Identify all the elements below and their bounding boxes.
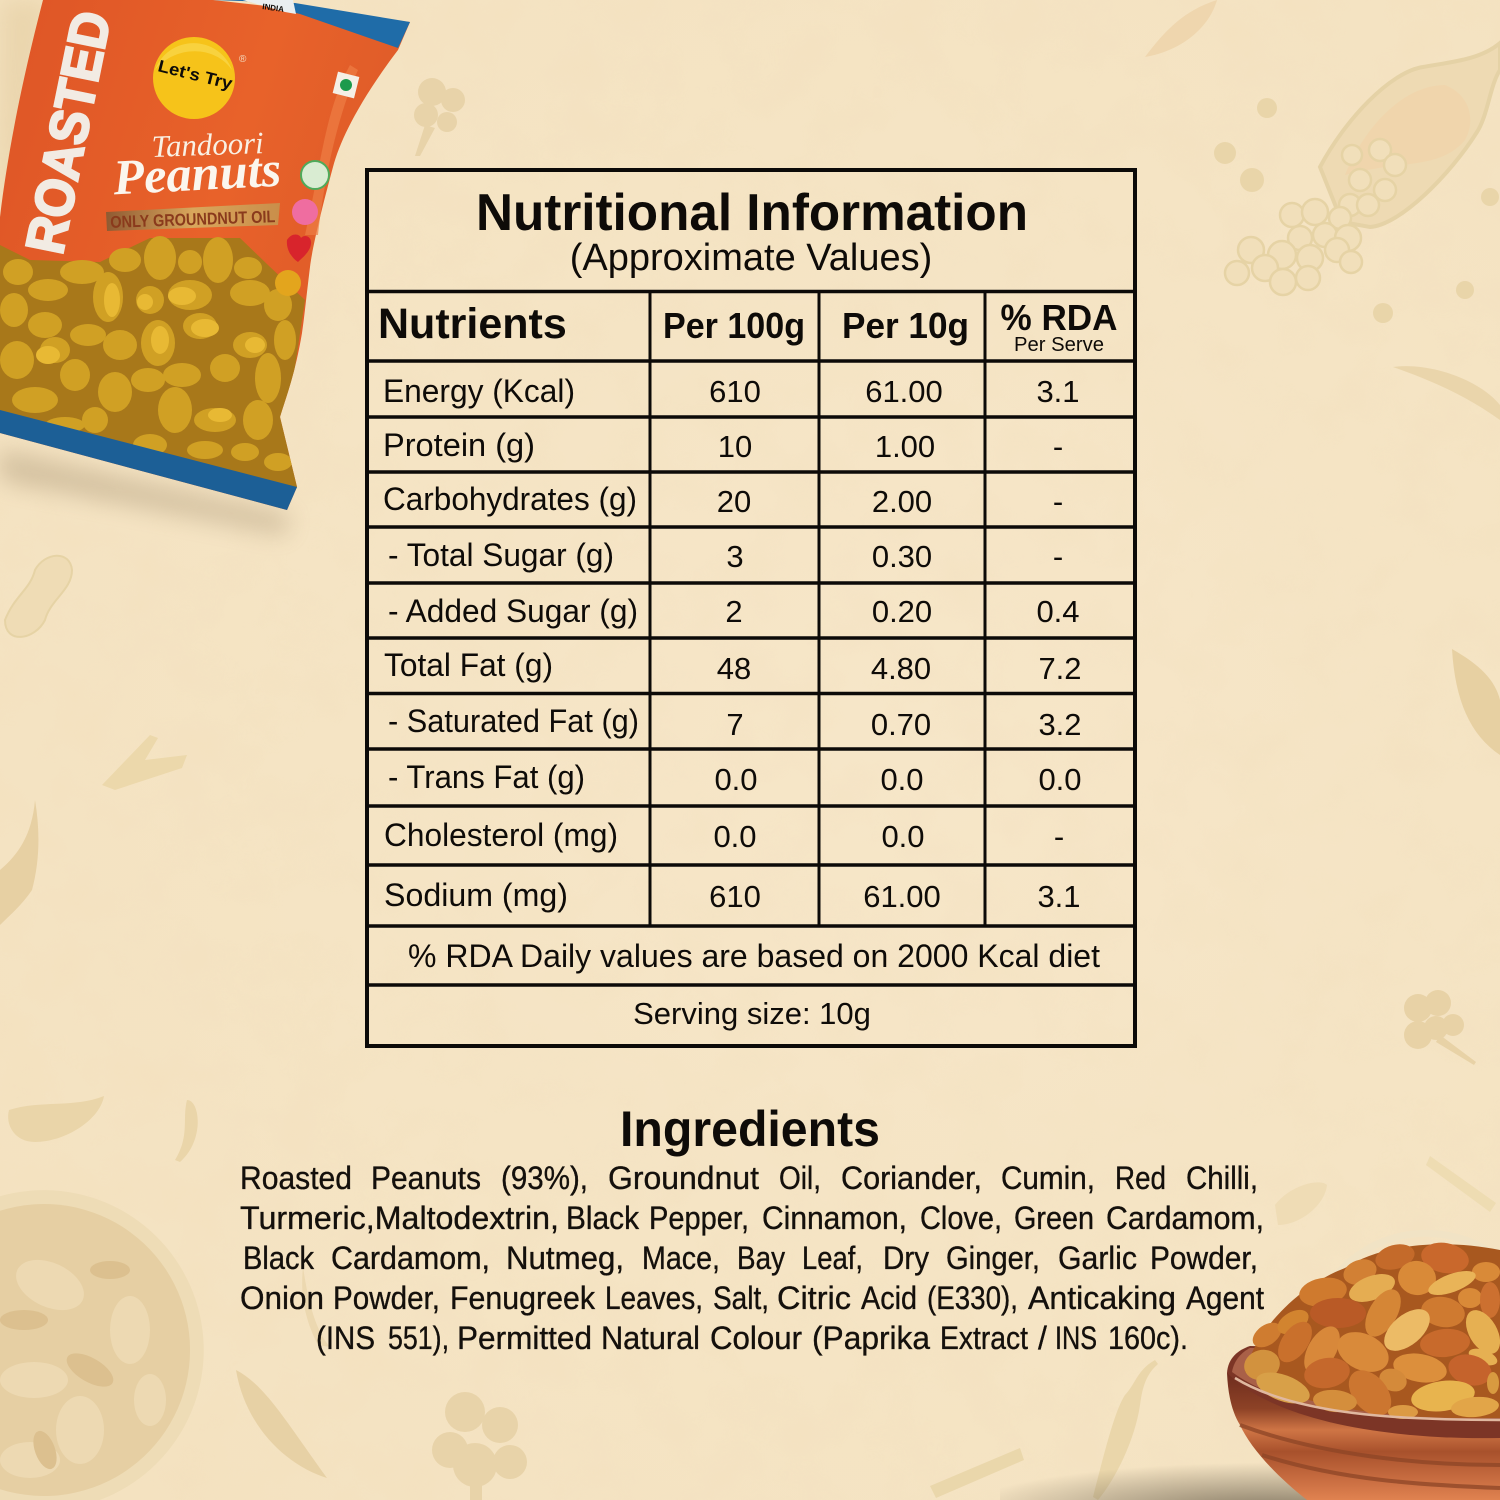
row: added sugar: - Added Sugar (g): [388, 593, 638, 629]
row: energy: 61.00: [865, 374, 943, 409]
row: sodium: 3.1: [1037, 879, 1081, 914]
product pack: [0, 0, 410, 510]
icon: bay leaf right: [1452, 649, 1500, 755]
icon: spice bowl bottom left: [0, 1190, 204, 1500]
header row: Nutrients: [378, 300, 567, 348]
header row: % RDA: [1000, 297, 1118, 338]
top blue seal: [213, 0, 410, 48]
product name: [106, 125, 282, 232]
ingredients text: Garlic: [1058, 1240, 1137, 1276]
header row: [378, 297, 1118, 356]
ingredients text: Anticaking: [1028, 1280, 1176, 1316]
rim front highlight: [1235, 1378, 1500, 1420]
row: cholesterol: 0.0: [881, 819, 925, 854]
row: total fat: 4.80: [871, 651, 931, 686]
bottom blue seal: [0, 410, 297, 510]
footnote: rda: % RDA Daily values are based on 2000 Kcal diet: [408, 938, 1100, 974]
nutrition table: [367, 170, 1135, 1046]
icon: coriander right: [1404, 990, 1476, 1065]
icon: bay leaf bottom: [236, 1370, 327, 1478]
pack shadow: [0, 450, 290, 535]
bowl shadow: [1000, 1420, 1500, 1500]
row: added sugar: 0.20: [872, 594, 932, 629]
pack highlight: [305, 65, 358, 235]
row: energy: 610: [709, 374, 761, 409]
ingredients text: Agent: [1186, 1280, 1264, 1316]
row: energy: Energy (Kcal): [383, 373, 575, 409]
ingredients text: Permitted: [457, 1320, 592, 1356]
icon: coriander bottom: [432, 1392, 527, 1500]
row: total fat: 48: [717, 651, 751, 686]
row: sodium: [384, 877, 1081, 914]
table title: Nutritional Information: [476, 183, 1028, 241]
row: carbohydrates: Carbohydrates (g): [383, 481, 637, 517]
icon: green chilli left: [0, 800, 38, 925]
ingredients text: Colour: [710, 1320, 802, 1356]
icon: peanut bottom left: [8, 1096, 104, 1142]
ingredients text: (93%),: [501, 1160, 588, 1196]
ingredients text: Onion: [240, 1280, 324, 1316]
logo: [153, 37, 247, 119]
ingredients heading: Ingredients: [620, 1101, 880, 1157]
row: trans fat: 0.0: [714, 762, 758, 797]
row: cholesterol: 0.0: [713, 819, 757, 854]
header row: Per 100g: [663, 305, 805, 346]
ingredients text: Black: [566, 1200, 640, 1236]
row: sodium: 610: [709, 879, 761, 914]
row: added sugar: 0.4: [1036, 594, 1080, 629]
product name: ONLY GROUNDNUT OIL: [110, 207, 276, 232]
bowl rim: [1227, 1346, 1500, 1438]
icon: peanut small: [175, 1100, 198, 1162]
ingredients text: Salt,: [713, 1280, 769, 1316]
row: total sugar: - Total Sugar (g): [388, 537, 614, 573]
ingredients text: Extract: [940, 1320, 1028, 1356]
row: cholesterol: Cholesterol (mg): [384, 817, 618, 853]
ingredients text: Cumin,: [1001, 1160, 1095, 1196]
ingredients text: Bay: [737, 1240, 785, 1276]
row: total sugar: 0.30: [872, 539, 932, 574]
ingredients text: Black: [243, 1240, 315, 1276]
ingredients text: Powder,: [1150, 1240, 1258, 1276]
ingredients text: Dry: [883, 1240, 929, 1276]
row: saturated fat: 0.70: [871, 707, 931, 742]
ingredients text: Peanuts: [371, 1160, 481, 1196]
row: protein: 1.00: [875, 429, 935, 464]
pack body: [0, 0, 410, 510]
peanut bowl: [1227, 1239, 1500, 1500]
ingredients text: Cardamom,: [1106, 1200, 1264, 1236]
ingredients text: Oil,: [779, 1160, 821, 1196]
ingredients text: Chilli,: [1186, 1160, 1258, 1196]
ingredients text: Clove,: [920, 1200, 1002, 1236]
table subtitle: (Approximate Values): [570, 237, 932, 279]
ingredients text: Powder,: [333, 1280, 440, 1316]
row: protein: [383, 427, 1063, 464]
row: total sugar: 3: [726, 539, 744, 574]
rim inner: [1232, 1348, 1500, 1420]
row: protein: 10: [718, 429, 752, 464]
ingredients text: INS: [1055, 1320, 1097, 1356]
row: carbohydrates: 20: [717, 484, 751, 519]
header row: Per 10g: [842, 305, 969, 346]
ingredients text: Citric: [777, 1280, 851, 1316]
ingredients text: (INS: [316, 1320, 375, 1356]
peanuts: [1241, 1239, 1500, 1424]
ingredients text: 551),: [388, 1320, 449, 1356]
row: added sugar: 2: [725, 594, 743, 629]
row: saturated fat: [388, 703, 1082, 742]
row: energy: [383, 373, 1080, 409]
ingredients text: Turmeric,Maltodextrin,: [240, 1200, 559, 1236]
header row: Per Serve: [1014, 333, 1104, 356]
row: energy: 3.1: [1036, 374, 1080, 409]
icon: cinnamon stick: [930, 1448, 1024, 1498]
row: total fat: [384, 647, 1082, 686]
ingredients text: Fenugreek: [450, 1280, 596, 1316]
icon: peanut left: [5, 556, 72, 637]
ingredients text: Nutmeg,: [506, 1240, 624, 1276]
row: total fat: Total Fat (g): [384, 647, 553, 683]
ingredients text: Acid: [861, 1280, 917, 1316]
row: saturated fat: 7: [726, 707, 744, 742]
product name: Peanuts: [111, 141, 282, 205]
icon: chilli right: [1393, 366, 1500, 420]
icon: peanut near text right: [1275, 1182, 1327, 1225]
ingredients text: (Paprika: [812, 1320, 930, 1356]
ingredients text: Mace,: [642, 1240, 720, 1276]
peanuts in pack: [0, 236, 305, 490]
row: total fat: 7.2: [1038, 651, 1082, 686]
white origin label: [243, 0, 296, 14]
ingredients text: Red: [1115, 1160, 1166, 1196]
logo: ®: [239, 54, 247, 65]
row: total sugar: [388, 537, 1063, 574]
ingredients text: Green: [1014, 1200, 1094, 1236]
ingredients text: Groundnut: [608, 1160, 759, 1196]
bowl stripes: [1240, 1425, 1500, 1488]
ingredients text: Leaves,: [605, 1280, 703, 1316]
icon: ring behind bowl: [1308, 1233, 1500, 1390]
icon: leaf top right: [1145, 0, 1217, 57]
ingredients text: Ginger,: [946, 1240, 1040, 1276]
icon: coriander top left: [414, 78, 465, 156]
ingredients text: Pepper,: [649, 1200, 749, 1236]
ingredients text: Leaf,: [802, 1240, 863, 1276]
row: saturated fat: - Saturated Fat (g): [388, 703, 639, 739]
row: carbohydrates: -: [1053, 484, 1063, 519]
icon: spice scoop top right: [1214, 43, 1500, 323]
row: sodium: 61.00: [863, 879, 941, 914]
white origin label: INDIA: [262, 2, 285, 14]
row: cholesterol: [384, 817, 1064, 854]
row: carbohydrates: [383, 481, 1063, 519]
top left mottled wash: [0, 0, 50, 200]
ingredients text: /: [1038, 1320, 1047, 1356]
ingredients text: Cardamom,: [331, 1240, 490, 1276]
ingredients text: (E330),: [927, 1280, 1018, 1316]
icon: faint chilli behind text: [302, 1267, 330, 1347]
row: trans fat: - Trans Fat (g): [388, 759, 585, 795]
logo: Let's Try: [156, 56, 235, 93]
icon: chilli bottom: [1093, 1360, 1158, 1500]
veg mark: [333, 72, 359, 98]
table frame and grid: [367, 170, 1135, 1046]
ingredients text: Coriander,: [841, 1160, 982, 1196]
row: trans fat: 0.0: [1038, 762, 1082, 797]
row: carbohydrates: 2.00: [872, 484, 932, 519]
row: total sugar: -: [1053, 539, 1063, 574]
row: trans fat: [388, 759, 1082, 797]
row: cholesterol: -: [1054, 819, 1064, 854]
bowl body: [1227, 1373, 1500, 1500]
row: saturated fat: 3.2: [1038, 707, 1082, 742]
ingredients text: [240, 1160, 1264, 1356]
footnote: serving size: Serving size: 10g: [633, 996, 871, 1031]
icon: cut peanut left: [102, 735, 187, 790]
row: sodium: Sodium (mg): [384, 877, 568, 913]
row: protein: Protein (g): [383, 427, 535, 463]
row: trans fat: 0.0: [880, 762, 924, 797]
product name: Tandoori: [151, 125, 264, 164]
row: added sugar: [388, 593, 1080, 629]
row: protein: -: [1053, 429, 1063, 464]
ingredients text: Cinnamon,: [762, 1200, 907, 1236]
badges: [275, 161, 329, 296]
icon: cinnamon stick right: [1426, 1156, 1496, 1212]
ingredients text: 160c).: [1108, 1320, 1188, 1356]
ingredients text: Roasted: [240, 1160, 352, 1196]
ingredients text: Natural: [601, 1320, 700, 1356]
